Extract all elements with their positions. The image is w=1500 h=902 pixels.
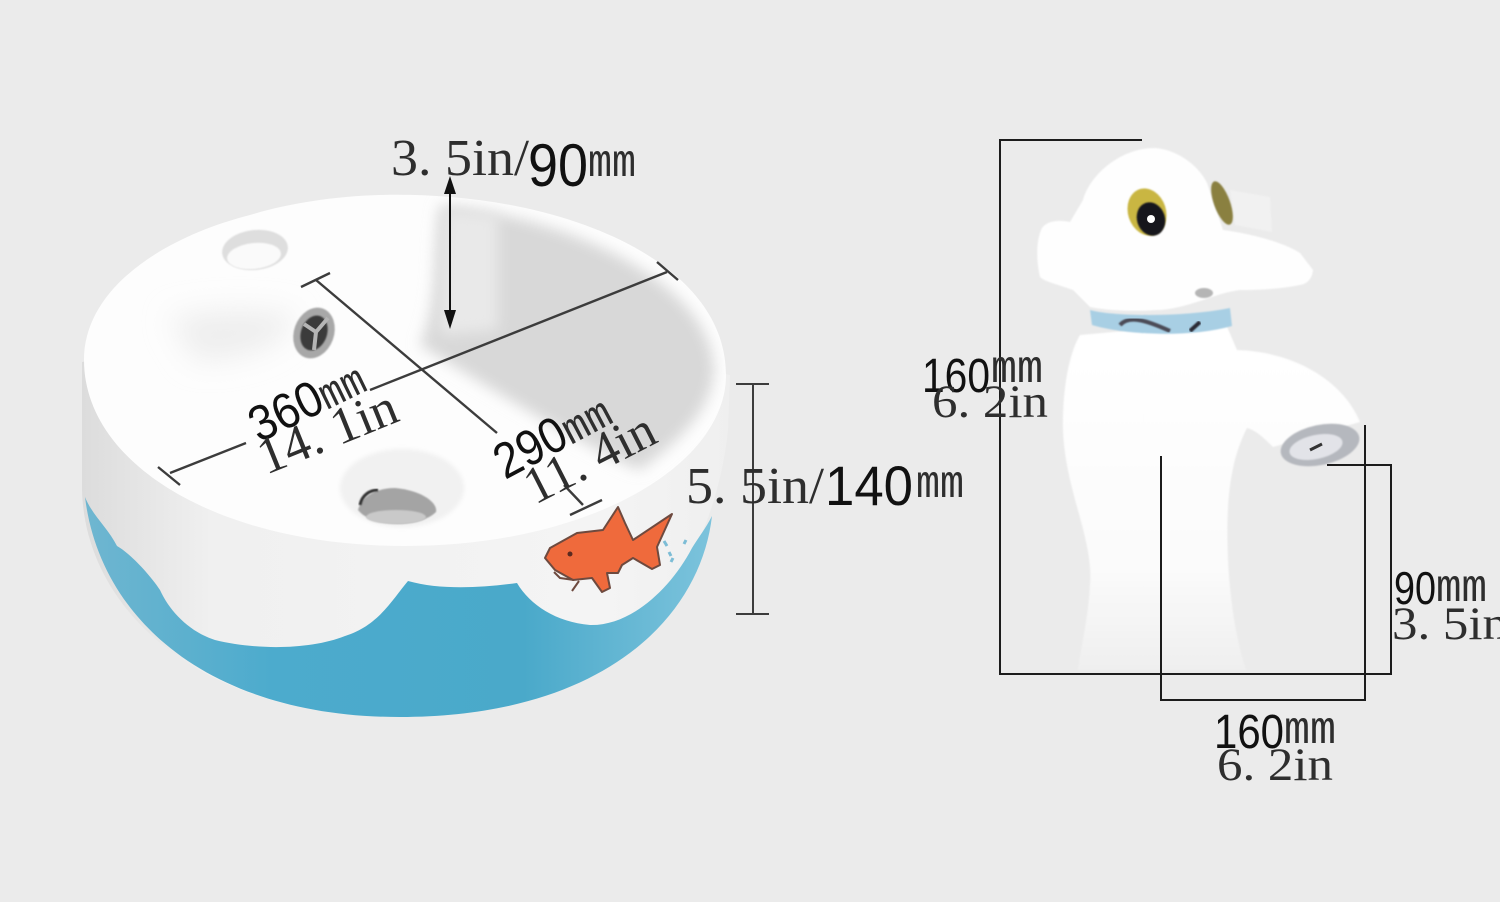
faucet spout and body [1063, 322, 1360, 670]
label: depth: 3. 5in/ [391, 130, 530, 187]
label: diameter: mm [311, 357, 375, 423]
panel: basin [82, 195, 730, 717]
label: spout height [1214, 705, 1336, 791]
icon: near eye [1122, 183, 1172, 241]
icon: far eye [1207, 179, 1237, 227]
icon: goldfish [545, 507, 686, 592]
label: faucet height [922, 344, 1048, 428]
panel: faucet dimension lines [1000, 140, 1391, 700]
label: faucet height: 160 [922, 350, 990, 403]
label: spout height: mm [1284, 705, 1336, 757]
faucet head [1037, 148, 1313, 311]
panel: faucet [1037, 148, 1363, 670]
label: diameter: 14. 1in [249, 379, 406, 486]
height bracket [736, 384, 769, 614]
bowl inner shading [170, 205, 714, 470]
label: faucet height: 6. 2in [932, 376, 1048, 428]
label: height: 140 [825, 454, 913, 517]
faucet aerator [1277, 417, 1363, 473]
label: spout height: 6. 2in [1217, 739, 1333, 791]
depth arrow [444, 176, 456, 329]
faucet nozzle stud [1195, 288, 1213, 298]
label: height [686, 454, 964, 517]
basin blue wave band [85, 497, 712, 717]
label: width: 11. 4in [515, 401, 665, 516]
label: diameter: 360 [239, 369, 332, 453]
faucet far ear [1230, 190, 1272, 232]
label: faucet height: mm [991, 344, 1043, 396]
basin rim and bowl [84, 195, 726, 546]
label: height: 5. 5in/ [686, 458, 825, 515]
label: depth: mm [588, 138, 636, 190]
label: depth: 90 [528, 132, 588, 199]
label: width: 290 [484, 405, 576, 490]
icon: overflow drain [286, 302, 342, 364]
label: depth [391, 130, 636, 199]
label: spout height: 160 [1214, 706, 1284, 759]
icon: faucet hole [220, 227, 290, 273]
label: spout reach: mm [1436, 563, 1487, 615]
width line [301, 273, 602, 515]
icon: drain bowl [340, 449, 464, 527]
diameter line [158, 262, 678, 485]
faucet collar [1090, 308, 1232, 334]
label: spout reach [1392, 562, 1500, 650]
label: spout reach: 3. 5in [1392, 598, 1500, 650]
label: height: mm [916, 459, 964, 511]
label: spout reach: 90 [1394, 562, 1436, 614]
basin outer body [82, 300, 730, 717]
panel: basin dimension lines [158, 176, 769, 614]
label: width: mm [554, 390, 622, 457]
